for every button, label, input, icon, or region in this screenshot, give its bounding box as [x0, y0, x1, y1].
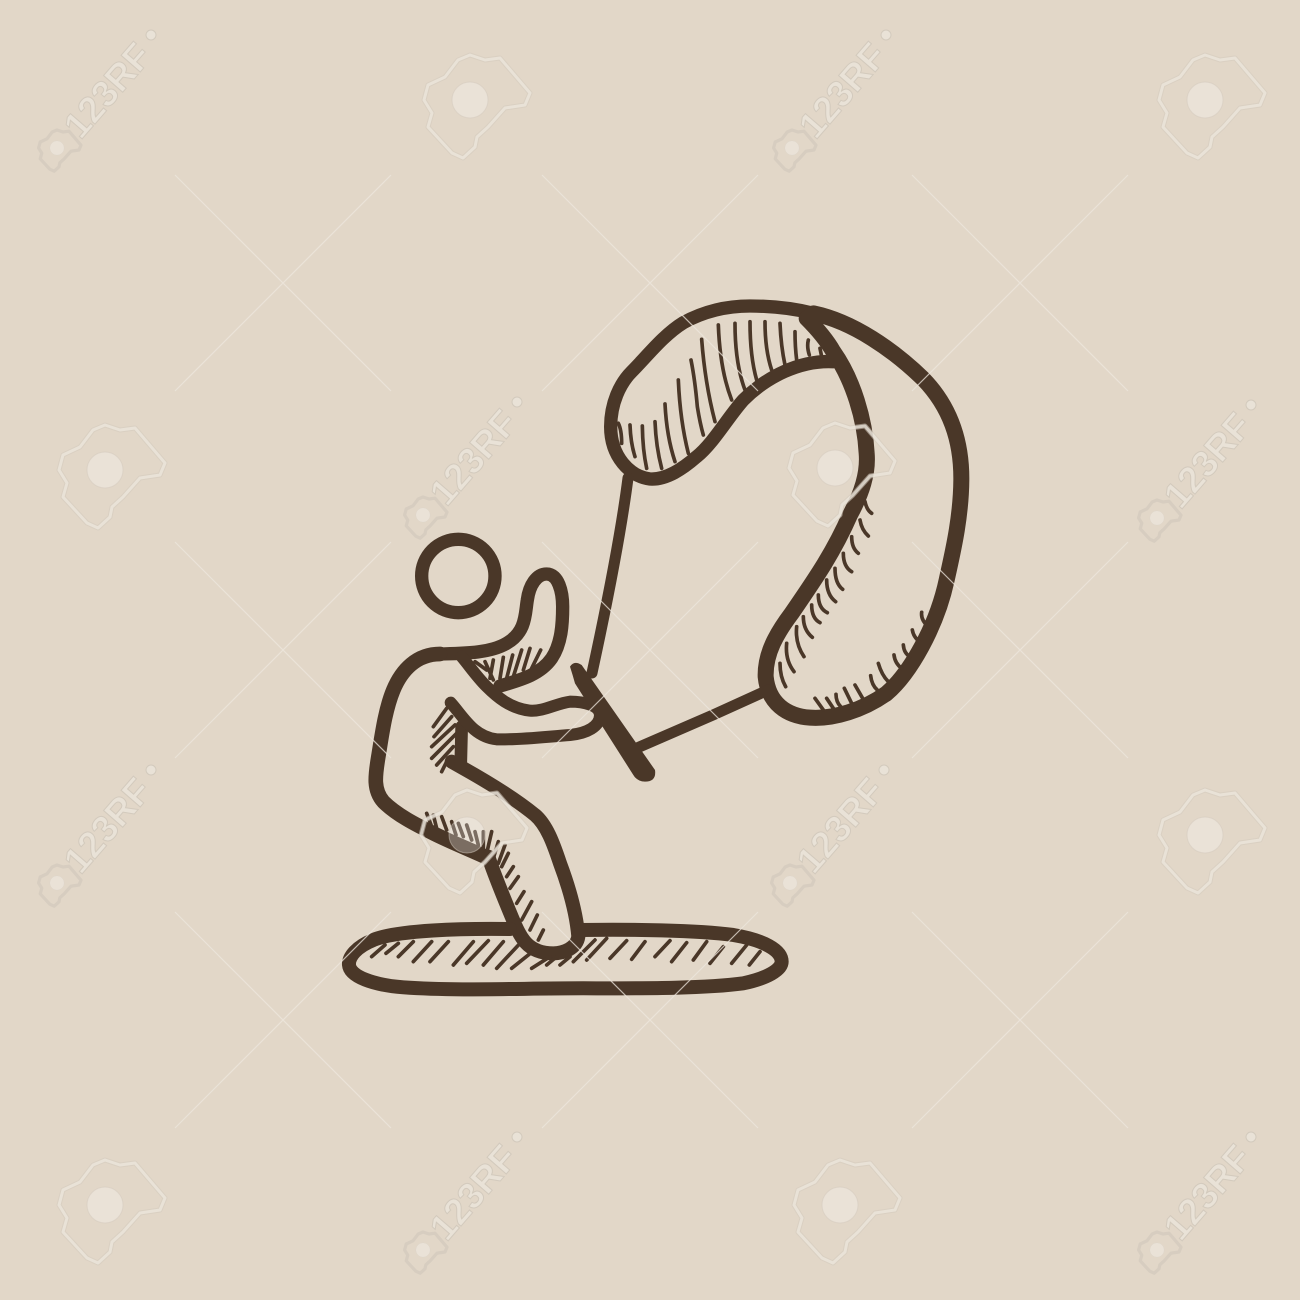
- watermark: 123RF logo bottom right: 123RF: [1156, 1137, 1259, 1248]
- watermark: 123RF logo top centre right: [774, 30, 894, 171]
- watermark: 123RF logo third row left: 123RF: [56, 770, 159, 881]
- watermark: 123RF logo bottom right: [1139, 1132, 1259, 1273]
- kite line: left: [592, 478, 628, 673]
- torso inner edge: [442, 727, 481, 767]
- body hatching: [475, 648, 541, 680]
- control bar: [570, 663, 655, 782]
- watermark: 123RF logo bottom left: [405, 1132, 525, 1273]
- torso side hatching: [432, 708, 457, 772]
- watermark: 123RF logo third row right: 123RF: [789, 770, 892, 881]
- watermark: large egg 5: [421, 790, 527, 893]
- watermark: 123RF logo bottom left: 123RF: [422, 1137, 525, 1248]
- lower leg and foot: [452, 762, 578, 953]
- watermark: 123RF logo second row left: [405, 397, 525, 538]
- watermark: large egg 4: [789, 423, 895, 526]
- watermark: 123RF logo second row right: [1139, 400, 1259, 541]
- watermark: large egg 3: [59, 425, 165, 528]
- watermark: 123RF logo top centre right: 123RF: [791, 35, 894, 146]
- watermark: large egg 7: [59, 1160, 165, 1263]
- kiteboard hatching: [372, 938, 760, 968]
- torso and thigh underside: [376, 654, 485, 857]
- icon: kitesurfer figure on board: [349, 539, 782, 989]
- watermark: 123RF logo third row left: [39, 765, 159, 906]
- watermark: 123RF logo second row right: 123RF: [1156, 405, 1259, 516]
- leg hatching: [427, 813, 543, 940]
- icon: kite: [592, 306, 961, 748]
- far arm: [440, 574, 563, 686]
- watermark: large egg 1: [424, 55, 530, 158]
- watermark: 123RF logo second row left: 123RF: [422, 402, 525, 513]
- kite canopy outline and hatching: [611, 306, 961, 718]
- watermark: large egg 8: [794, 1160, 900, 1263]
- watermark: large egg 2: [1159, 55, 1265, 158]
- kite line: right: [637, 690, 768, 748]
- watermark: 123RF logo third row right: [772, 765, 892, 906]
- head: [422, 539, 495, 613]
- watermark: large egg 6: [1159, 790, 1265, 893]
- watermark: 123RF logo top left: 123RF: [56, 35, 159, 146]
- watermark: 123RF logo top left: [39, 30, 159, 171]
- kiteboard outline: [349, 929, 782, 989]
- near arm: [451, 657, 600, 739]
